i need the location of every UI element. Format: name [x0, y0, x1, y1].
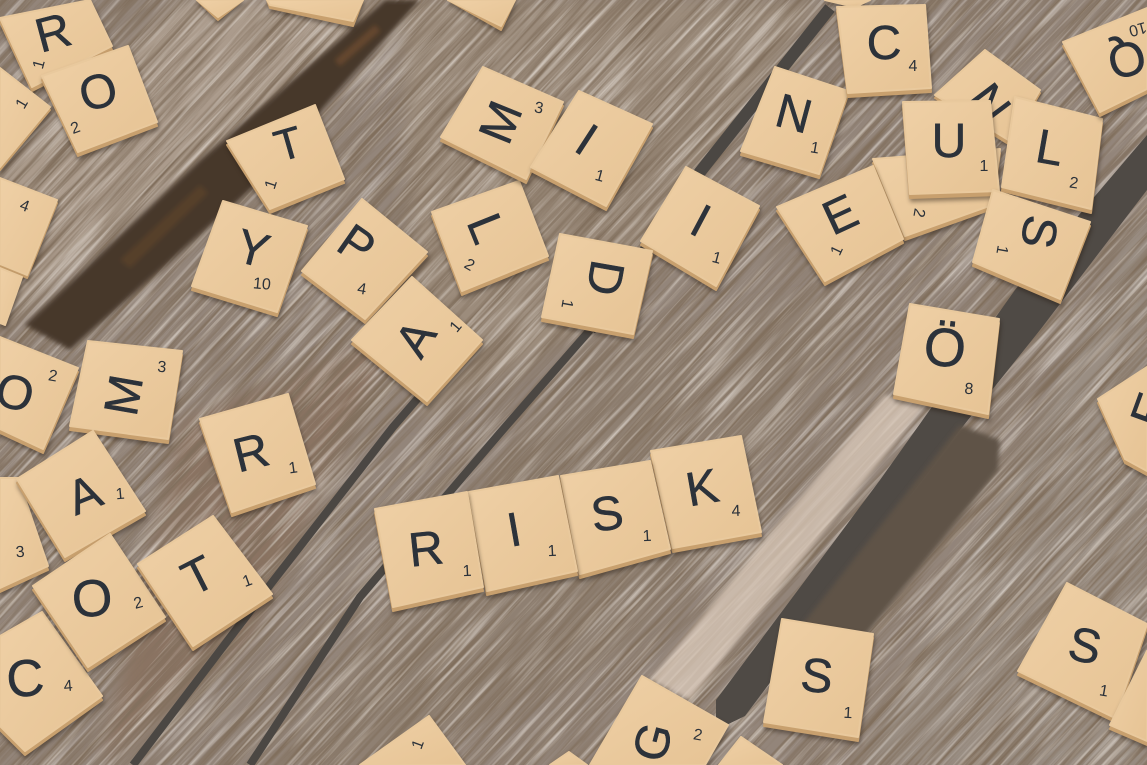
tile: S upper right	[973, 190, 1090, 303]
tile: G	[590, 676, 728, 765]
plank gaps	[133, 8, 830, 765]
tile: U: U	[932, 115, 966, 168]
tile: A left: A	[60, 465, 109, 526]
tile: partial top D	[825, 0, 870, 7]
tile: partial top C	[448, 0, 515, 30]
tile: left partial with 1: 1	[13, 96, 32, 112]
tile: K: 4	[731, 503, 741, 520]
tile: R middle left: R	[228, 424, 275, 483]
tile: I upper: 1	[593, 167, 606, 186]
tile: I upper	[531, 91, 652, 210]
tile: O umlaut: Ö	[921, 316, 969, 380]
tile: T	[227, 105, 344, 213]
tile: Y	[192, 201, 307, 316]
tile: D: 1	[557, 298, 576, 310]
tile: C top	[837, 5, 931, 97]
tile: S bottom right	[1018, 583, 1147, 722]
tile: E	[777, 166, 903, 285]
tile: A left: 1	[115, 486, 125, 503]
tile: M upper: 3	[533, 99, 545, 118]
tile: I middle	[641, 167, 759, 290]
tile: A: 1	[447, 318, 466, 336]
tile: I: 1	[547, 543, 557, 560]
tile: D	[542, 234, 652, 338]
tile: Y: 10	[252, 275, 272, 294]
tile: G: 2	[692, 726, 704, 745]
tile: E: 1	[828, 243, 847, 258]
tile: C lower left: C	[4, 648, 46, 710]
tile: E: E	[815, 185, 866, 246]
tile: P: P	[328, 214, 384, 276]
tile: L: L	[456, 206, 515, 251]
tile: T lower left: T	[174, 546, 224, 607]
tile: S	[561, 461, 670, 578]
tile: C top: 4	[909, 58, 918, 75]
tile: O lower left: 2	[132, 594, 145, 613]
tile: N behind: N	[957, 74, 1020, 134]
tile: K: K	[682, 460, 723, 517]
dark plank band, upper left	[25, 0, 420, 350]
tile: R: 1	[462, 563, 472, 580]
tile: left partial with 4: 4	[17, 197, 32, 216]
tile: M upper: M	[469, 94, 533, 151]
tile: S bottom right: S	[1064, 617, 1106, 676]
tile: L right: L	[1032, 120, 1067, 177]
tile: I	[469, 476, 577, 595]
tile: M left: 3	[157, 359, 167, 376]
tile: O lower left	[33, 534, 165, 671]
tile: L	[432, 181, 548, 295]
tile: bottom partial: 1	[409, 737, 428, 752]
tile: C top: C	[866, 16, 902, 71]
tile: A: A	[385, 311, 447, 366]
tile: R top left: R	[30, 3, 77, 64]
tile: M upper	[441, 67, 563, 183]
tile: R middle left: 1	[288, 459, 299, 478]
word: RISK	[375, 436, 761, 611]
tile: T lower left	[138, 516, 272, 650]
tile: I middle: 1	[710, 249, 723, 268]
tile: behind with 2	[873, 149, 1000, 240]
tile: N	[741, 67, 848, 178]
tile: P: 4	[356, 280, 368, 299]
tile: N: N	[770, 84, 817, 145]
tile: S bottom: 1	[843, 705, 853, 722]
tile: S: S	[588, 486, 627, 543]
tile: S bottom	[764, 619, 873, 741]
tile: O top left: O	[73, 62, 123, 123]
tile: O left	[0, 337, 78, 453]
tile: Q top right	[1063, 8, 1147, 116]
tile: R	[375, 492, 483, 611]
tile: right partial	[1098, 367, 1147, 475]
tile: S: 1	[642, 528, 652, 545]
tile: R top left	[0, 0, 112, 91]
tile: S bottom right: 1	[1098, 682, 1110, 701]
tile: N behind	[935, 50, 1040, 145]
tile: left sliver	[0, 268, 22, 325]
tile: left partial with 1	[0, 68, 50, 170]
tile: bottom small partial B	[719, 737, 782, 765]
tile: D: D	[575, 256, 634, 299]
tile: L: 2	[461, 256, 477, 275]
tile: L right	[1002, 97, 1102, 213]
tile: S upper right: 1	[992, 244, 1011, 256]
tile: R middle left	[200, 394, 315, 516]
right plank gap	[716, 135, 1147, 730]
tile: L right: 2	[1068, 174, 1079, 193]
tile: T lower left: 1	[240, 572, 255, 591]
tile: C lower left: 4	[63, 678, 73, 695]
tile: A	[352, 277, 482, 405]
tile: O top left	[42, 46, 157, 156]
tile: bottom small partial A	[550, 752, 587, 765]
tile: left partial 3	[0, 478, 48, 592]
tile: Y: Y	[230, 220, 275, 279]
tile: partial top B	[267, 0, 363, 26]
tile: I: I	[503, 503, 525, 558]
tile: T: T	[269, 117, 308, 172]
tile: R top left: 1	[30, 58, 49, 71]
tile: I upper: I	[566, 114, 606, 166]
tile: bottom partial	[360, 716, 465, 765]
tile: O left: 2	[47, 367, 59, 386]
tile: partial top A	[197, 0, 243, 20]
tile: K	[651, 436, 761, 552]
tile: T: 1	[262, 178, 281, 191]
tile: M left	[70, 341, 182, 443]
tile: S upper right: S	[1010, 211, 1067, 252]
tile: left partial with 4	[0, 178, 57, 278]
tile: P	[302, 199, 427, 323]
tile: S bottom: S	[798, 648, 836, 705]
tile: O lower left: O	[69, 568, 115, 630]
tile: A left	[17, 431, 145, 561]
tile: O top left: 2	[68, 119, 83, 138]
tile: bottom right partial	[1110, 651, 1147, 745]
tile: N: 1	[809, 139, 821, 158]
tile: O umlaut	[894, 304, 999, 418]
pale strip beside the right plank gap	[650, 395, 925, 700]
tile: U	[903, 101, 999, 198]
tile: left partial 3: 3	[15, 544, 25, 561]
tile: R: R	[406, 521, 446, 578]
tile: behind with 2: 2	[909, 207, 928, 219]
tile: O umlaut: 8	[964, 381, 974, 398]
tile: M left: M	[95, 371, 154, 420]
tile: U: 1	[980, 158, 989, 175]
tile: C lower left	[0, 612, 102, 755]
tile: I middle: I	[682, 195, 719, 248]
